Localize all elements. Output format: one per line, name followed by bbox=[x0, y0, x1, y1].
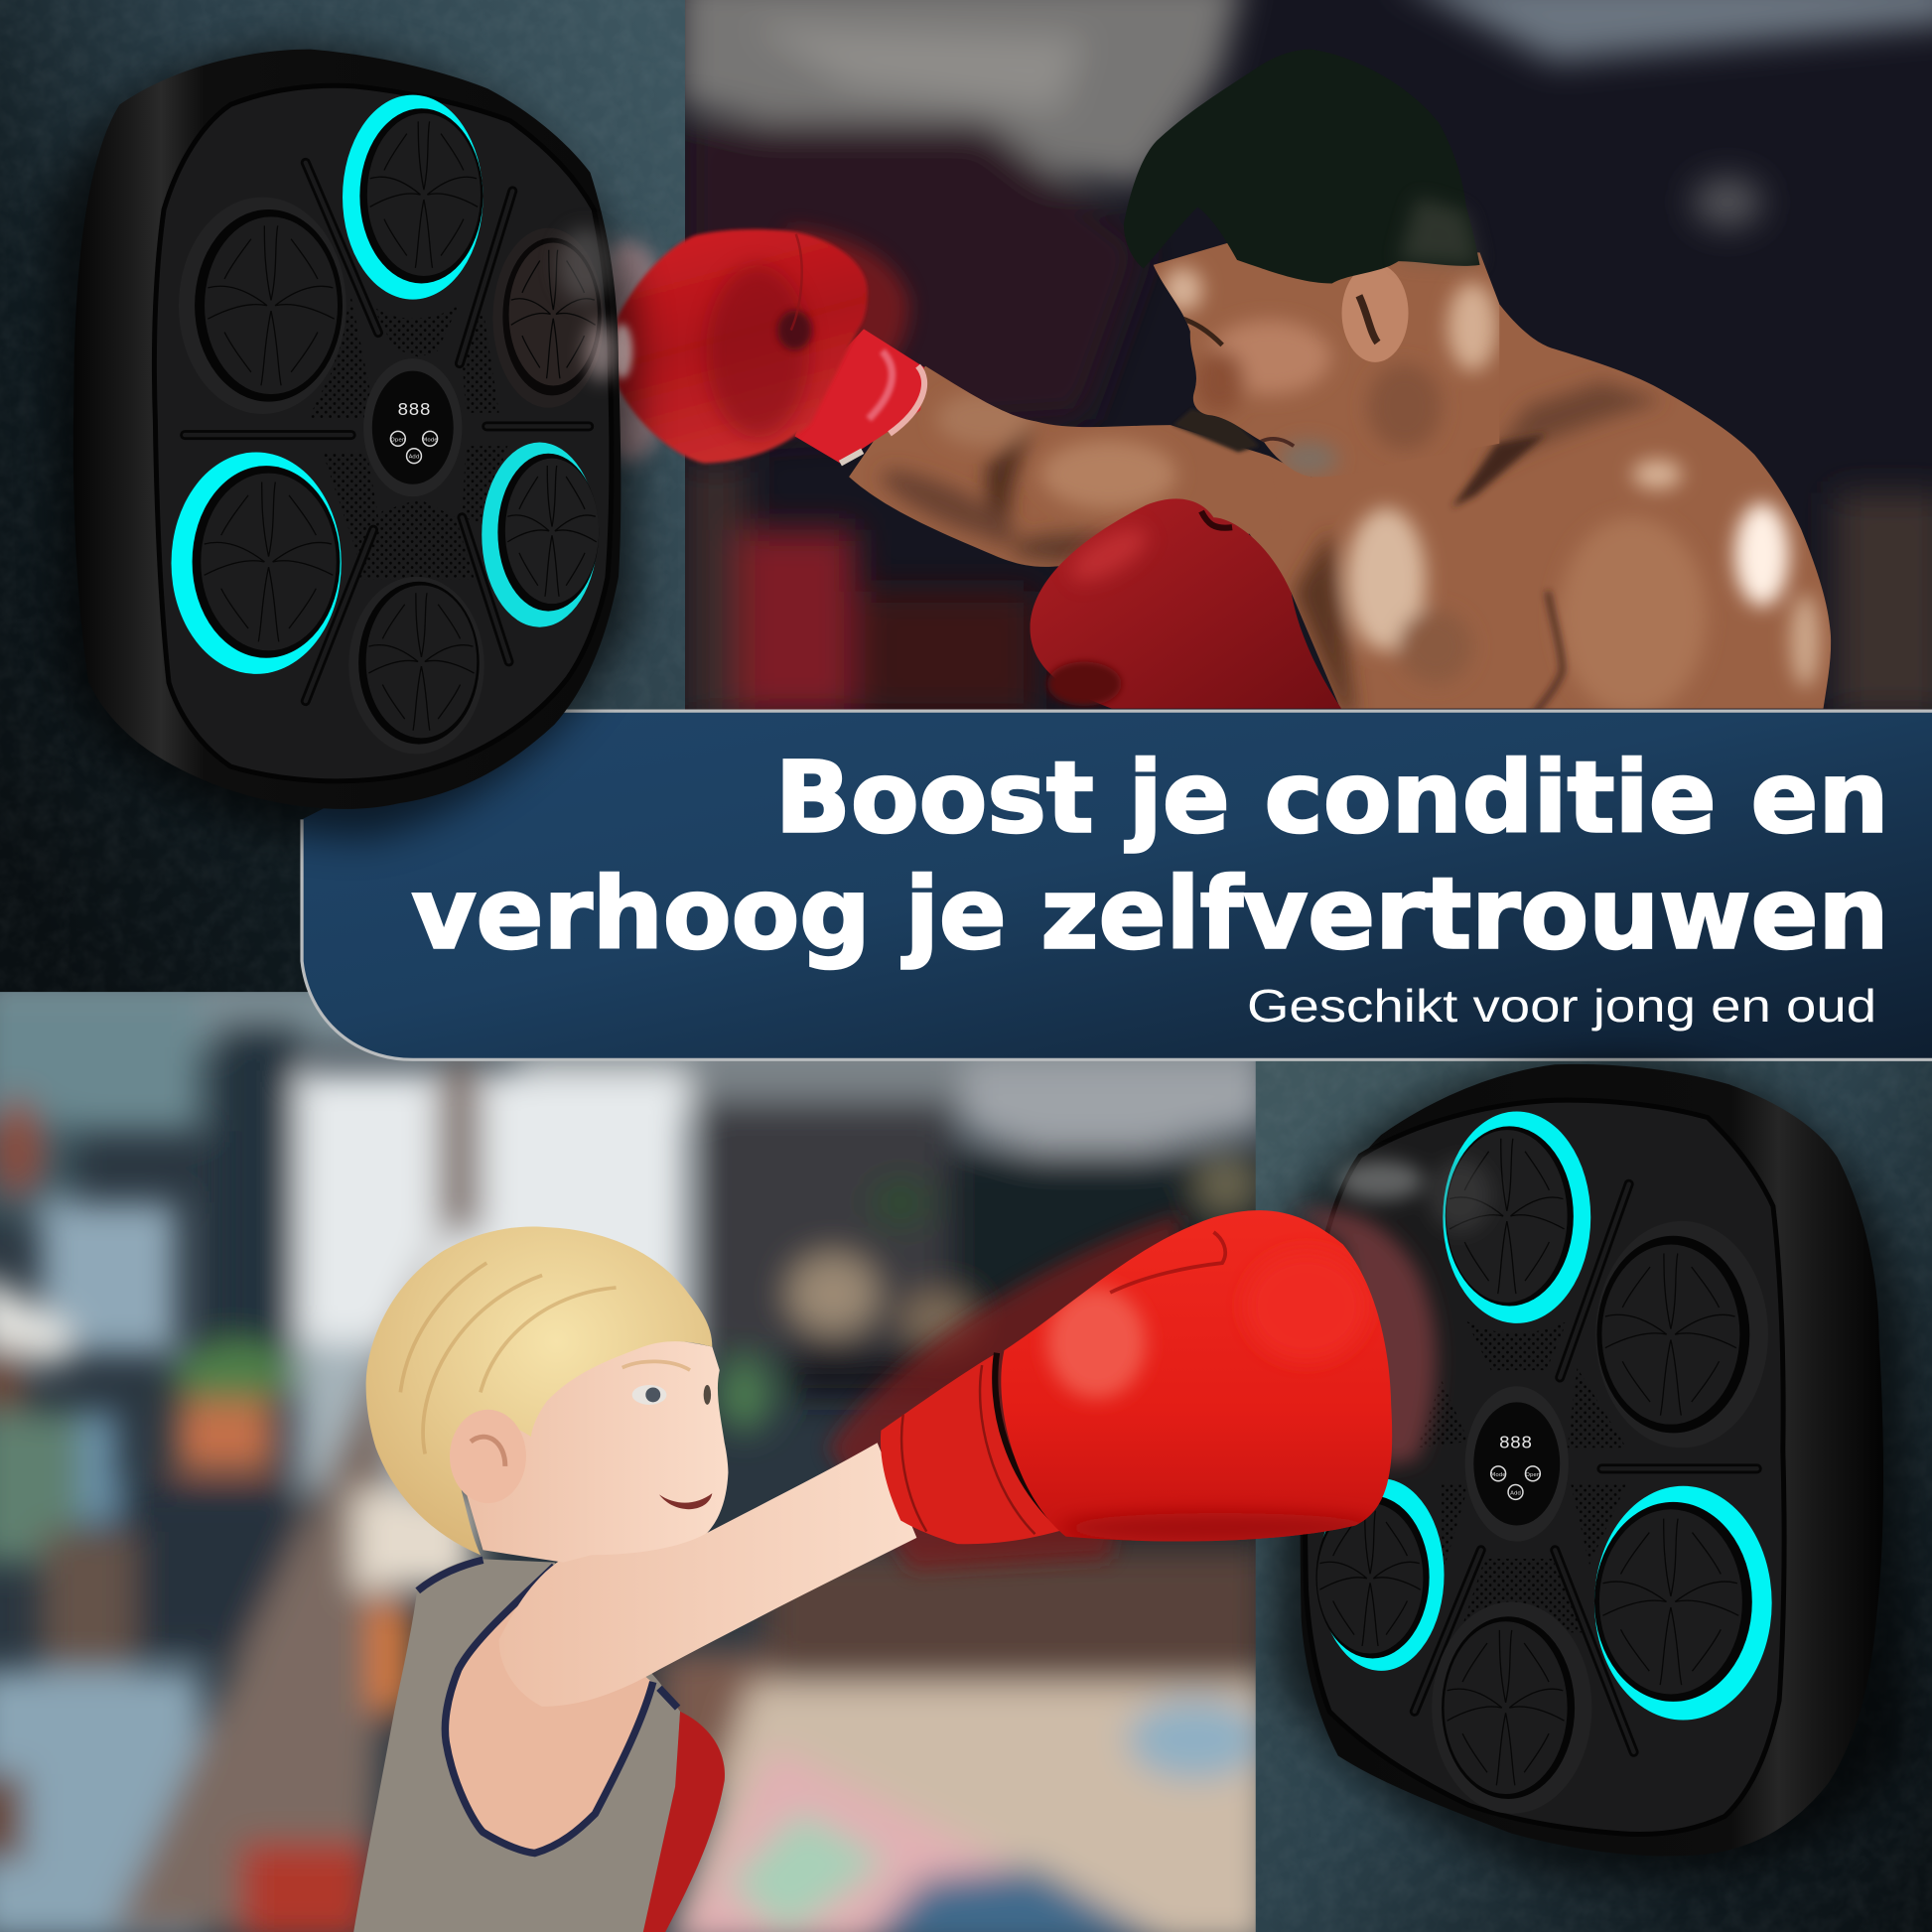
banner border bbox=[302, 711, 1932, 1059]
control display: 888 bbox=[397, 400, 431, 421]
background glove blur bbox=[828, 1213, 1182, 1571]
control display bbox=[363, 358, 462, 496]
control display: 888 bbox=[1499, 1433, 1532, 1453]
photo: child punching bbox=[353, 1213, 1182, 1932]
boxer armpit tattoo bbox=[1173, 409, 1259, 452]
device shadow bbox=[50, 48, 634, 838]
control display: Mode bbox=[423, 437, 438, 443]
lower guard glove bbox=[1031, 498, 1345, 715]
speaker dots bbox=[1417, 1320, 1626, 1632]
boxer hair bbox=[1124, 50, 1480, 283]
child arm bbox=[499, 1443, 916, 1707]
speaker dots bbox=[308, 296, 507, 579]
tank top trim bbox=[418, 1560, 678, 1854]
motion trail of punching glove bbox=[763, 228, 909, 382]
grooves bbox=[185, 163, 589, 701]
glove main bbox=[986, 1195, 1405, 1553]
button: upper left bbox=[179, 198, 346, 414]
child eyebrow bbox=[622, 1361, 690, 1370]
child smile bbox=[659, 1493, 712, 1509]
extended arm bbox=[849, 365, 1269, 567]
device shadow bbox=[1276, 1062, 1907, 1878]
groove inner bbox=[1415, 1184, 1757, 1752]
child ear bbox=[450, 1410, 526, 1503]
child eye bbox=[632, 1385, 711, 1405]
banner: headline panel bbox=[302, 711, 1932, 1059]
panel: blurred gym background bbox=[678, 0, 1932, 721]
control display: Add bbox=[409, 455, 420, 461]
device body bbox=[73, 50, 621, 809]
button: lower left lit bbox=[1315, 1478, 1445, 1671]
child hair bbox=[366, 1227, 712, 1555]
control display: Open bbox=[1525, 1472, 1541, 1478]
device: punching machine top-left bbox=[50, 48, 634, 838]
boxer head bbox=[1154, 243, 1499, 477]
panel: blurred playroom background bbox=[0, 973, 1282, 1932]
photo: boxer punching bbox=[584, 50, 1849, 715]
device body bbox=[1301, 1064, 1883, 1856]
button: bottom bbox=[348, 577, 484, 755]
hair fade bbox=[1399, 198, 1480, 265]
control display: Mode bbox=[1491, 1472, 1506, 1478]
button: top lit bbox=[343, 95, 483, 300]
impact glow bbox=[584, 240, 673, 462]
grooves bbox=[1415, 1184, 1757, 1752]
button: lower right lit bbox=[482, 443, 599, 627]
impact smoke bbox=[1294, 1159, 1492, 1466]
panel: bottom-right wall bbox=[1256, 1059, 1932, 1932]
subheading: Geschikt voor jong en oud bbox=[1247, 980, 1876, 1032]
large red boxing glove bbox=[881, 1195, 1405, 1553]
button: lower right lit bbox=[1594, 1486, 1772, 1721]
child tank top bbox=[353, 1559, 680, 1932]
boxer ear bbox=[1342, 264, 1409, 362]
button: upper right bbox=[1595, 1221, 1768, 1448]
groove inner bbox=[185, 163, 589, 701]
punching glove bbox=[609, 229, 868, 464]
button: lower left lit bbox=[172, 452, 342, 674]
device face bbox=[154, 85, 612, 781]
control display bbox=[1465, 1386, 1569, 1542]
child neck and face bbox=[462, 1336, 728, 1563]
headline line 1: Boost je conditie en bbox=[775, 742, 1889, 856]
panel: top-left wall bbox=[0, 0, 685, 993]
control display: Open bbox=[390, 437, 406, 443]
impact smoke bbox=[558, 228, 617, 380]
glove cuff seam bbox=[995, 1353, 1066, 1532]
device: punching machine bottom-right bbox=[1276, 1062, 1907, 1878]
child torso skin bbox=[445, 1565, 652, 1854]
punching glove cuff bbox=[794, 329, 924, 464]
button: bottom bbox=[1432, 1601, 1591, 1814]
button: top lit bbox=[1443, 1111, 1590, 1323]
glove cuff bbox=[881, 1353, 1066, 1544]
banner shape bbox=[302, 711, 1932, 1059]
button: upper right bbox=[492, 228, 604, 408]
device face bbox=[1306, 1100, 1784, 1835]
headline line 2: verhoog je zelfvertrouwen bbox=[412, 857, 1889, 971]
control display: Add bbox=[1510, 1490, 1521, 1496]
boxer torso bbox=[1249, 304, 1831, 709]
child second glove bbox=[643, 1712, 725, 1932]
